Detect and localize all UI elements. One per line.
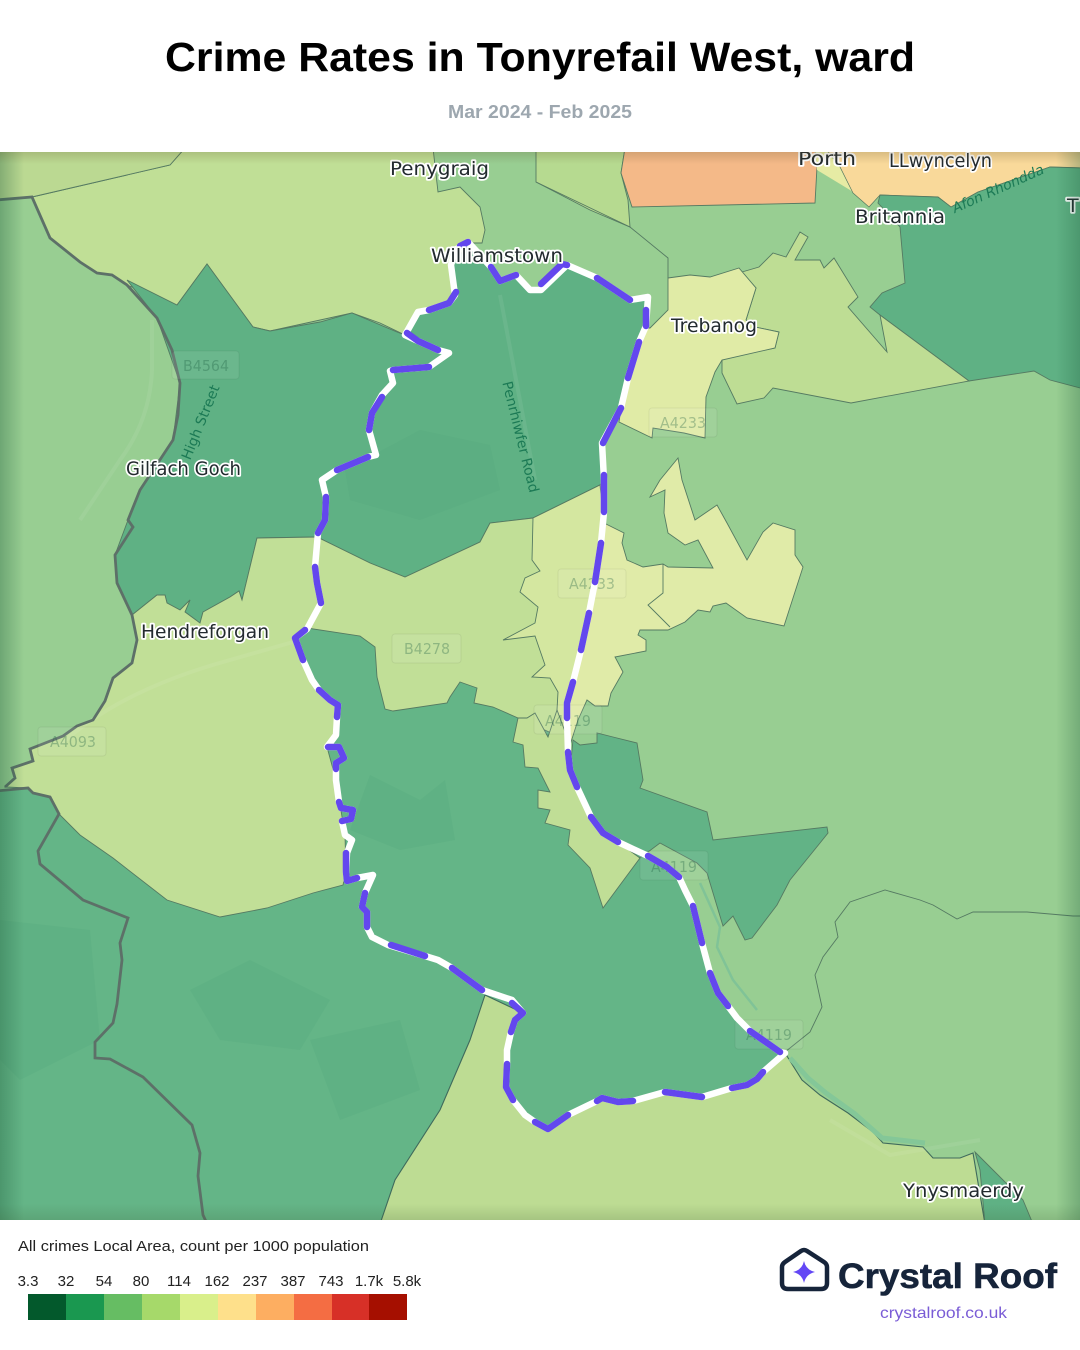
legend tick values: 5.8k <box>393 1273 422 1290</box>
road shield: A4119 lower: A4119 <box>746 1026 792 1044</box>
thin district boundary <box>785 890 1080 1052</box>
area: top-left corner <box>0 152 182 198</box>
area: central and western light green <box>5 485 604 917</box>
legend tick values: 387 <box>280 1273 306 1290</box>
thick boundary: north-west <box>0 197 180 787</box>
place label: Porth: Porth <box>798 148 856 170</box>
place label: Hendreforgan: Hendreforgan <box>141 621 269 643</box>
road name: Penrhiwfer Road: Penrhiwfer Road <box>498 380 541 494</box>
legend <box>18 1238 422 1320</box>
river beside ward <box>700 883 757 1010</box>
road shield: A4233 south: A4233 <box>569 575 615 593</box>
legend tick values <box>18 1273 422 1290</box>
area: river valley light green <box>513 710 640 908</box>
road shield: A4233 north <box>649 408 717 437</box>
logo: Crystal Roof <box>782 1250 1057 1322</box>
road shield: A4233 south <box>558 569 626 598</box>
boundary line north of Trebanog <box>536 182 668 278</box>
legend tick values: 237 <box>242 1273 268 1290</box>
area: orange high-crime <box>621 148 817 207</box>
road shield: A4119 centre: A4119 <box>545 712 591 730</box>
place label: clipped T: T <box>1066 195 1079 217</box>
place label: Penygraig: Penygraig <box>390 158 489 180</box>
legend tick values: 80 <box>133 1273 149 1290</box>
legend tick values: 743 <box>318 1273 344 1290</box>
area: Porth amber <box>825 148 1080 207</box>
area: top light green <box>536 148 630 227</box>
subtitle: date range: Mar 2024 - Feb 2025 <box>448 101 632 122</box>
logo wordmark: Crystal Roof <box>838 1257 1057 1296</box>
legend tick values: 162 <box>204 1273 230 1290</box>
place label: Gilfach Goch: Gilfach Goch <box>126 458 241 480</box>
legend tick values: 54 <box>96 1273 112 1290</box>
area: Trebanog east light green <box>722 232 969 404</box>
area: Tonyrefail east pale <box>567 458 803 745</box>
road shield: A4119 lower <box>735 1020 803 1049</box>
river name: Afon Rhondda: Afon Rhondda <box>949 162 1047 217</box>
area: south-east light green <box>380 995 985 1224</box>
legend colour scale <box>28 1294 407 1320</box>
area: south-east dark green <box>570 733 828 940</box>
area: Tonyrefail west pale <box>503 485 604 740</box>
title: Crime Rates in Tonyrefail West, ward <box>165 34 915 80</box>
legend tick values: 3.3 <box>18 1273 38 1290</box>
road shield: B4278 <box>392 634 461 663</box>
logo url: crystalroof.co.uk <box>880 1305 1008 1322</box>
legend tick values: 1.7k <box>355 1273 384 1290</box>
icon: house with star <box>782 1250 827 1289</box>
road shield: A4119 south-east <box>640 851 708 880</box>
area: east dark green <box>870 167 1080 389</box>
legend title: All crimes Local Area, count per 1000 population <box>18 1238 369 1255</box>
boundary inside Tonyrefail east <box>648 564 670 627</box>
area: north-west dark green including ward north <box>115 243 648 623</box>
road shield: B4564 <box>172 351 239 379</box>
place label: LLwyncelyn: LLwyncelyn <box>889 150 992 172</box>
road shield: A4093: A4093 <box>50 733 96 751</box>
road shield: A4119 centre <box>534 705 602 734</box>
road shield: A4093 <box>38 727 106 756</box>
road shield: A4233 north: A4233 <box>660 414 706 432</box>
place label: Trebanog: Trebanog <box>670 315 757 337</box>
road shield: B4278: B4278 <box>404 640 450 658</box>
road name: High Street: High Street <box>179 382 224 462</box>
legend tick values: 32 <box>58 1273 74 1290</box>
place label: Ynysmaerdy: Ynysmaerdy <box>902 1180 1024 1202</box>
area: southern dark green including ward south <box>0 628 785 1224</box>
road and valley texture <box>299 295 927 1151</box>
thick boundary: south-west <box>0 788 210 1230</box>
area: Porth pale <box>815 152 852 192</box>
area: Ynysmaerdy dark green <box>975 1152 1033 1224</box>
map edge fade <box>0 152 1080 1220</box>
ward boundary: purple dashes <box>295 242 780 1129</box>
ward boundary: white casing <box>295 242 785 1129</box>
place label: Williamstown: Williamstown <box>431 245 563 267</box>
area: Trebanog pale <box>619 268 779 438</box>
road shield: B4564: B4564 <box>183 357 229 375</box>
area: north-west light green <box>32 148 485 335</box>
place label: Britannia: Britannia <box>855 206 945 228</box>
road shield: A4119 south-east: A4119 <box>651 858 697 876</box>
forest texture patches <box>0 430 500 1120</box>
river valley band <box>790 1058 925 1143</box>
legend tick values: 114 <box>167 1273 191 1290</box>
